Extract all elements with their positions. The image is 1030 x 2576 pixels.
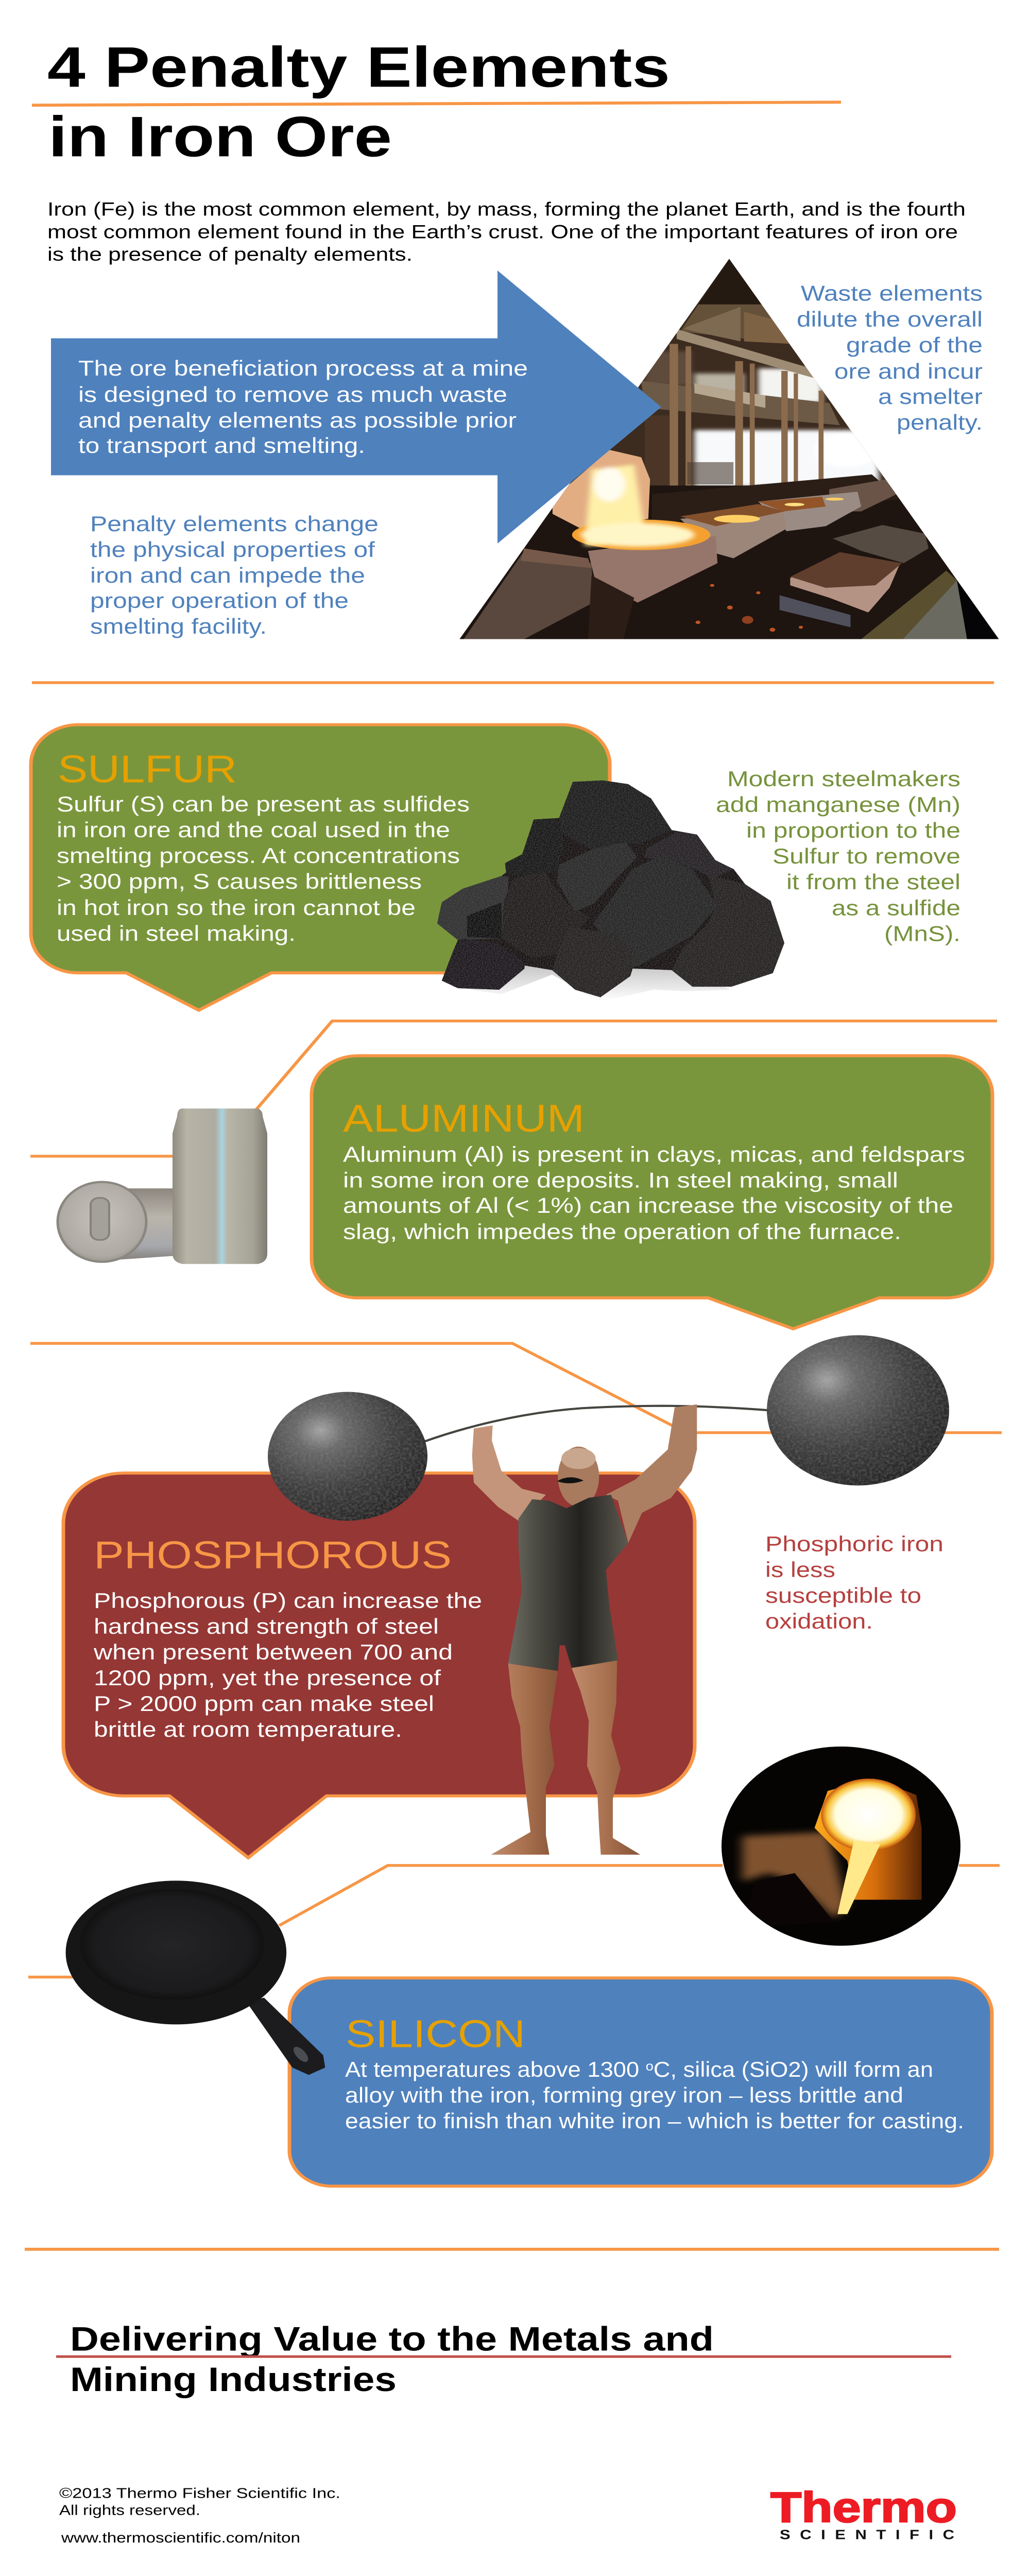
panel: silicon: [289, 1978, 992, 2186]
text: sulfur description: in hot iron so the iron cannot be: [57, 895, 416, 920]
text: phosphorous description: 1200 ppm, yet the presence of: [94, 1666, 441, 1690]
sparks: [695, 584, 803, 632]
logo: thermo scientific: SCIENTIFIC: [780, 2528, 954, 2543]
lower right ladles: [833, 525, 929, 563]
text: modern steelmakers: in proportion to the: [746, 818, 960, 842]
copyright: [59, 2486, 340, 2546]
image: aluminum cans: [58, 1109, 267, 1264]
text: modern steelmakers: [716, 767, 960, 946]
intro text: is the presence of penalty elements.: [47, 243, 413, 265]
text: modern steelmakers: (MnS).: [884, 922, 960, 946]
heading: phosphorous: PHOSPHOROUS: [94, 1533, 452, 1577]
title: 4 Penalty Elements: [47, 35, 670, 99]
text: phosphorous description: hardness and strength of steel: [94, 1614, 439, 1638]
heading: sulfur: SULFUR: [58, 747, 237, 791]
text: waste elements: a smelter: [878, 384, 983, 409]
text: penalty elements: proper operation of the: [90, 588, 349, 613]
arrow with beneficiation text: The ore beneficiation process at a mine: [78, 356, 528, 380]
photo: smelter in triangle: [453, 258, 1007, 643]
text: phosphorous description: P > 2000 ppm can make steel: [94, 1691, 434, 1716]
strongman figure: [472, 1404, 697, 1855]
orange line behind skillet: [28, 1975, 74, 1979]
barbell ball right: [767, 1335, 949, 1485]
text: modern steelmakers: add manganese (Mn): [716, 792, 960, 817]
text: phosphorous description: [93, 1588, 482, 1741]
text: waste elements: ore and incur: [834, 359, 983, 383]
text: silicon description: alloy with the iron, forming grey iron – less brittle and: [345, 2083, 903, 2107]
arrow with beneficiation text: [51, 270, 661, 544]
text: silicon description: At temperatures above 1300: [345, 2057, 670, 2081]
text: aluminum description: in some iron ore deposits. In steel making, small: [343, 1168, 898, 1192]
title: [32, 35, 841, 168]
arrow with beneficiation text: and penalty elements as possible prior: [78, 408, 517, 432]
copyright: www.thermoscientific.com/niton: [61, 2530, 300, 2546]
text: aluminum description: amounts of Al (< 1%) can increase the viscosity of the: [343, 1193, 953, 1217]
text: waste elements: Waste elements: [801, 281, 983, 305]
text: phosphoric iron: oxidation.: [765, 1609, 873, 1633]
text: silicon description: C, silica (SiO2) will form an: [654, 2057, 933, 2081]
panel: sulfur: [31, 725, 610, 1010]
text: silicon description: [345, 2057, 964, 2133]
text: modern steelmakers: it from the steel: [786, 870, 960, 894]
text: sulfur description: [57, 792, 470, 945]
text: sulfur description: in iron ore and the coal used in the: [57, 818, 450, 842]
logo: thermo scientific: Thermo: [770, 2484, 957, 2531]
intro text: [47, 198, 966, 265]
text: silicon description: o: [646, 2059, 654, 2074]
text: sulfur description: smelting process. At concentrations: [57, 843, 460, 868]
text: phosphorous description: Phosphorous (P) can increase the: [94, 1588, 482, 1613]
arrow with beneficiation text: is designed to remove as much waste: [78, 382, 507, 406]
text: penalty elements: the physical properties of: [90, 537, 375, 562]
text: phosphorous description: when present between 700 and: [93, 1640, 453, 1664]
text: waste elements: [797, 281, 983, 434]
barbell ball left: [268, 1392, 427, 1521]
text: modern steelmakers: as a sulfide: [832, 896, 960, 920]
barbell bar: [424, 1406, 770, 1442]
closing statement: Delivering Value to the Metals and: [70, 2320, 714, 2358]
panel: phosphorous: [63, 1473, 695, 1858]
text: phosphorous description: brittle at room temperature.: [94, 1717, 402, 1741]
text: waste elements: grade of the: [846, 333, 983, 357]
text: penalty elements: Penalty elements change: [90, 512, 379, 536]
text: penalty elements: smelting facility.: [90, 614, 267, 638]
text: sulfur description: > 300 ppm, S causes brittleness: [57, 869, 422, 893]
text: phosphoric iron: susceptible to: [765, 1583, 921, 1607]
text: phosphoric iron: is less: [765, 1557, 835, 1582]
copyright: All rights reserved.: [59, 2503, 200, 2518]
text: aluminum description: [343, 1142, 965, 1244]
image: skillet pan: [66, 1880, 325, 2075]
ladle row: [829, 479, 897, 512]
corner wall: [857, 570, 957, 642]
text: phosphoric iron: [765, 1532, 943, 1633]
text: modern steelmakers: Modern steelmakers: [727, 767, 960, 791]
text: modern steelmakers: Sulfur to remove: [772, 844, 960, 868]
arrow with beneficiation text: to transport and smelting.: [78, 433, 365, 457]
copyright: ©2013 Thermo Fisher Scientific Inc.: [59, 2486, 340, 2501]
text: penalty elements: iron and can impede the: [90, 563, 365, 587]
closing statement: Mining Industries: [70, 2361, 397, 2398]
intro text: Iron (Fe) is the most common element, by mass, forming the planet Earth, and is the fourth: [47, 198, 966, 219]
image: molten iron ladle circle: [722, 1747, 960, 1946]
text: silicon description: easier to finish than white iron – which is better for casting.: [345, 2109, 964, 2133]
text: aluminum description: slag, which impedes the operation of the furnace.: [343, 1219, 901, 1244]
text: sulfur description: used in steel making.: [57, 921, 296, 945]
intro text: most common element found in the Earth’s crust. One of the important features of iron ore: [47, 221, 958, 243]
title: in Iron Ore: [48, 105, 392, 168]
text: waste elements: penalty.: [897, 410, 983, 434]
text: sulfur description: Sulfur (S) can be present as sulfides: [57, 792, 470, 816]
closing statement: [56, 2320, 951, 2398]
text: waste elements: dilute the overall: [797, 307, 983, 331]
heading: aluminum: ALUMINUM: [343, 1097, 585, 1140]
big ladle: [464, 551, 593, 639]
text: aluminum description: Aluminum (Al) is present in clays, micas, and feldspars: [343, 1142, 965, 1166]
image: coal pile: [437, 781, 784, 1002]
heading: silicon: SILICON: [346, 2012, 525, 2056]
text: penalty elements: [90, 512, 379, 638]
panel: aluminum: [312, 1056, 992, 1329]
text: phosphoric iron: Phosphoric iron: [765, 1532, 943, 1556]
image: strongman with barbell: [268, 1335, 949, 1855]
